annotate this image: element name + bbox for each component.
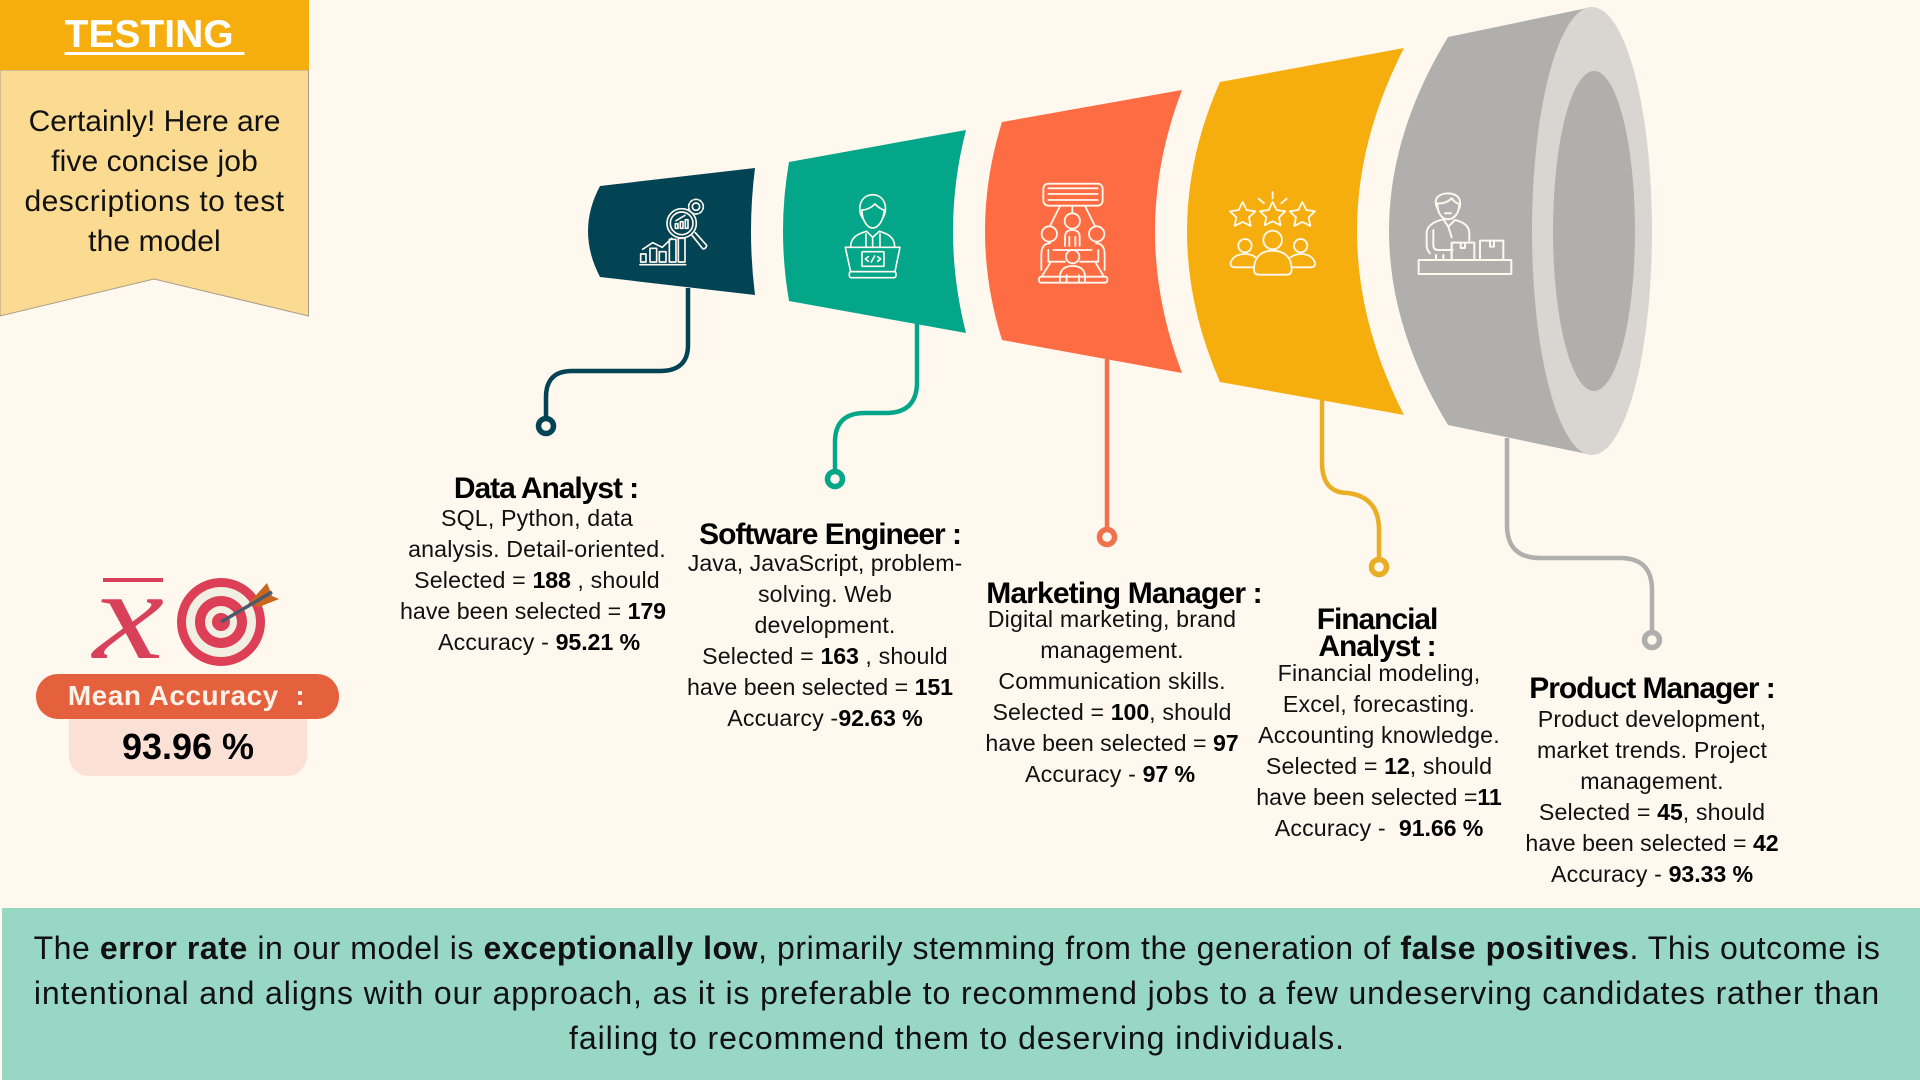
job: Financial Analyst: Excel, forecasting. <box>1283 691 1475 717</box>
job: Marketing Manager <box>985 577 1262 787</box>
job: Financial Analyst: have been selected =11 <box>1256 784 1502 810</box>
icon: software engineer <box>845 195 900 278</box>
connector: Financial Analyst <box>1322 399 1386 574</box>
job: Product Manager: management. <box>1580 768 1724 794</box>
connector: Software Engineer <box>828 324 917 486</box>
job: Data Analyst: have been selected = 179 <box>400 598 666 624</box>
icon: marketing meeting <box>1039 184 1107 283</box>
job: Product Manager: Accuracy - 93.33 % <box>1551 861 1753 887</box>
job: Marketing Manager: Communication skills. <box>998 668 1226 694</box>
connector: Data Analyst <box>538 288 688 434</box>
conclusion band: intentional and aligns with our approach, as it is preferable to recommend jobs to a few undeserving candidates rather than <box>34 975 1880 1011</box>
job title: Product Manager : <box>1529 672 1775 705</box>
ribbon body <box>0 70 309 317</box>
job title: Software Engineer : <box>699 518 961 551</box>
job: Financial Analyst: Financial modeling, <box>1278 660 1480 686</box>
job: Financial Analyst <box>1256 603 1502 841</box>
job: Data Analyst: analysis. Detail-oriented. <box>408 536 666 562</box>
job: Product Manager: have been selected = 42 <box>1525 830 1779 856</box>
ribbon heading <box>0 0 309 70</box>
job: Marketing Manager: Digital marketing, brand <box>988 606 1236 632</box>
job title: Financial <box>1317 603 1437 636</box>
ribbon: testing intro <box>0 0 309 317</box>
job: Software Engineer: Accuarcy -92.63 % <box>727 705 923 731</box>
job: Product Manager: market trends. Project <box>1537 737 1767 763</box>
icon: data analysis <box>640 199 707 265</box>
funnel segment: Financial Analyst <box>1187 48 1404 415</box>
conclusion band: failing to recommend them to deserving individuals. <box>569 1020 1345 1056</box>
job: Software Engineer: have been selected = 151 <box>687 674 953 700</box>
job: Marketing Manager: Selected = 100, should <box>992 699 1232 725</box>
mean accuracy callout <box>36 674 339 776</box>
job: Software Engineer: Java, JavaScript, problem- <box>688 550 962 576</box>
job: Data Analyst <box>400 472 666 655</box>
funnel segment: Data Analyst <box>588 168 755 295</box>
job title: Data Analyst : <box>454 472 638 505</box>
ribbon description <box>24 104 285 258</box>
icon: mean symbol and target <box>91 545 279 686</box>
connector: Product Manager <box>1507 438 1660 648</box>
job: Product Manager: Product development, <box>1538 706 1766 732</box>
job: Data Analyst: SQL, Python, data <box>441 505 633 531</box>
ribbon description: the model <box>88 225 221 258</box>
connector: Marketing Manager <box>1100 359 1114 544</box>
conclusion band <box>2 908 1920 1080</box>
job: Software Engineer: solving. Web <box>758 581 892 607</box>
funnel segment: Marketing Manager <box>985 90 1182 373</box>
icon: product manager <box>1419 193 1511 274</box>
job: Financial Analyst: Accuracy - 91.66 % <box>1275 815 1483 841</box>
job title: Analyst : <box>1318 630 1436 663</box>
conclusion band: The error rate in our model is exceptionally low, primarily stemming from the generation of false positives. This outcome is <box>34 930 1880 966</box>
job: Software Engineer: development. <box>754 612 896 638</box>
job: Financial Analyst: Accounting knowledge. <box>1258 722 1500 748</box>
ribbon description: Certainly! Here are <box>29 104 280 138</box>
funnel segment: Product Manager <box>1389 7 1652 455</box>
job: Data Analyst: Accuracy - 95.21 % <box>438 629 640 655</box>
job: Marketing Manager: management. <box>1040 637 1184 663</box>
job: Software Engineer <box>687 518 962 731</box>
job title <box>1317 603 1437 663</box>
job: Marketing Manager: have been selected = 97 <box>985 730 1239 756</box>
ribbon heading: TESTING <box>65 13 234 56</box>
job title: Marketing Manager : <box>986 577 1262 610</box>
job: Data Analyst: Selected = 188 , should <box>414 567 660 593</box>
job: Marketing Manager: Accuracy - 97 % <box>1025 761 1195 787</box>
value box: 93.96 % <box>122 726 254 767</box>
ribbon description: five concise job <box>51 145 258 178</box>
label pill: Mean Accuracy : <box>68 680 305 711</box>
job: Software Engineer: Selected = 163 , should <box>702 643 948 669</box>
icon: mean symbol and target: x <box>91 545 164 686</box>
ribbon description: descriptions to test <box>24 185 285 218</box>
job: Financial Analyst: Selected = 12, should <box>1266 753 1492 779</box>
value box <box>69 704 307 776</box>
funnel segment: Software Engineer <box>783 130 966 333</box>
label pill <box>36 674 339 719</box>
job: Product Manager: Selected = 45, should <box>1539 799 1765 825</box>
icon: rated team <box>1230 192 1315 275</box>
job: Product Manager <box>1525 672 1779 887</box>
